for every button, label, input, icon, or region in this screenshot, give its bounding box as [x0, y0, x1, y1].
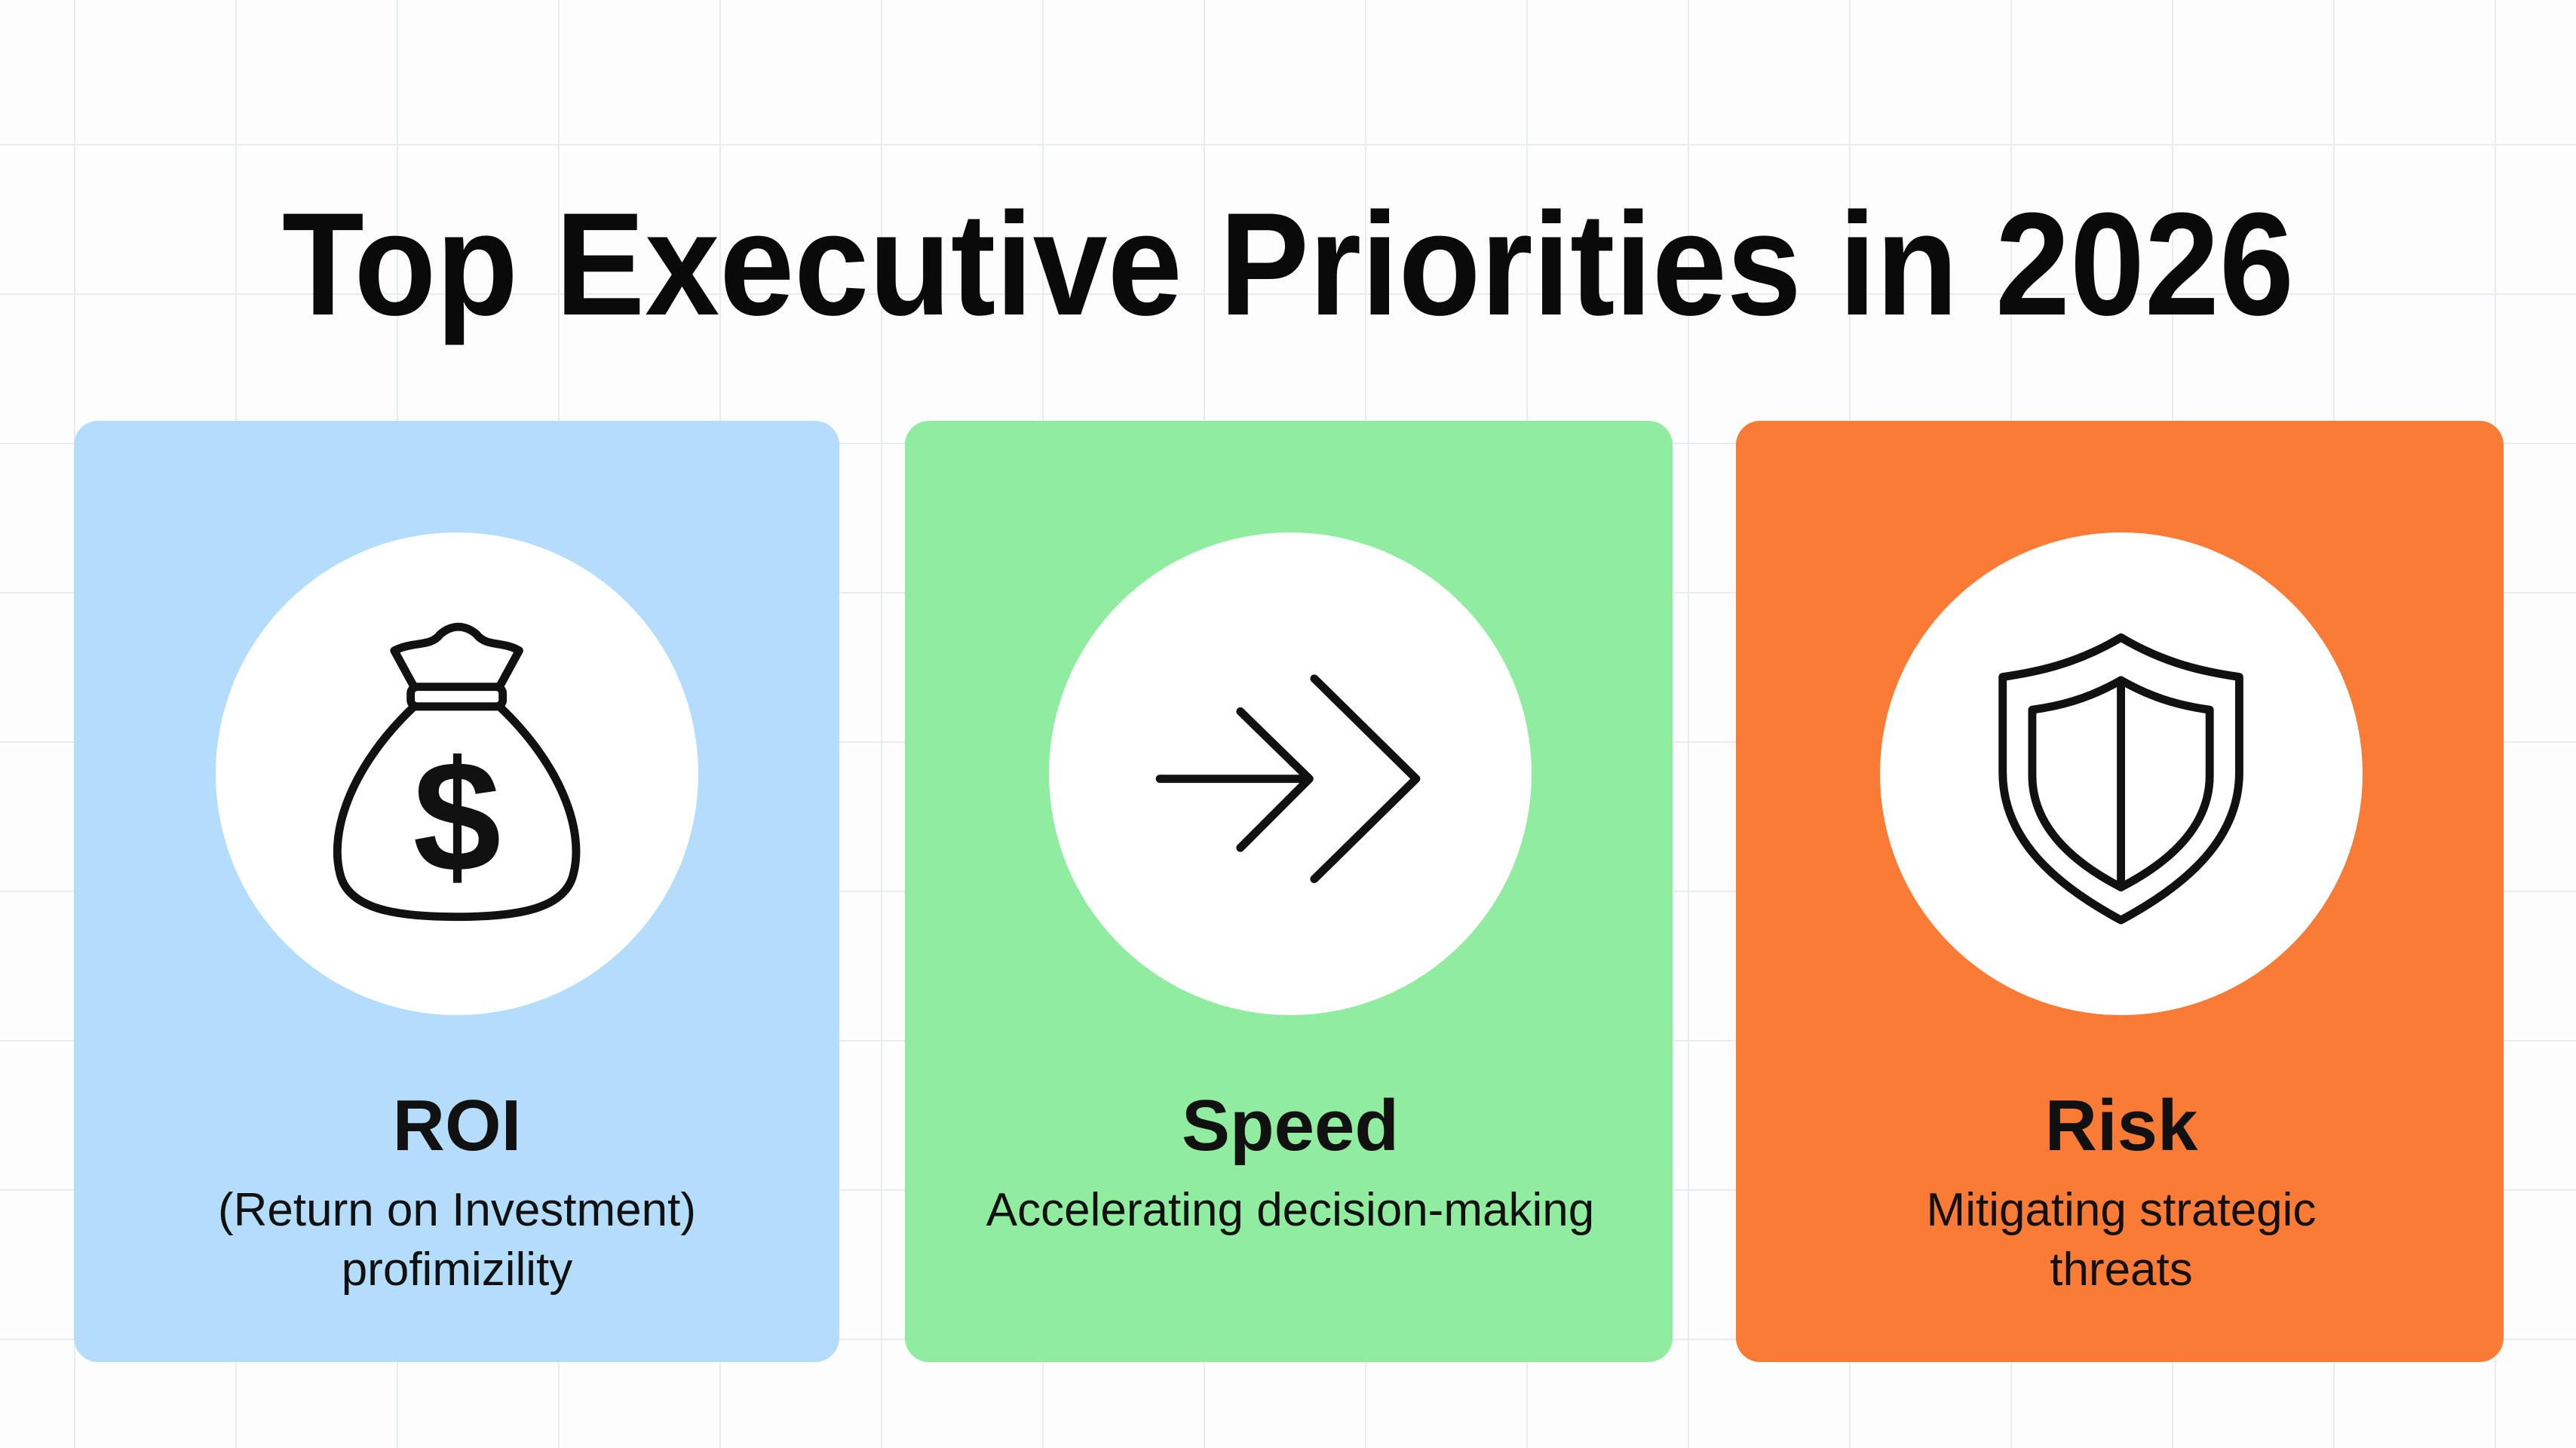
- icon: money bag: [216, 532, 698, 1015]
- panel: Risk: [1736, 421, 2504, 1362]
- label: Risk: Risk: [2045, 1085, 2198, 1166]
- text: Speed description: Accelerating decision-making: [986, 1184, 1594, 1236]
- text: Risk description: Mitigating strategic: [1927, 1184, 2316, 1236]
- label: Speed: Speed: [1182, 1085, 1399, 1166]
- icon: shield: [1880, 532, 2363, 1015]
- icon: fast forward arrow: [1049, 532, 1532, 1015]
- title: Top Executive Priorities in 2026: [282, 183, 2294, 346]
- panel: Speed: [905, 421, 1673, 1362]
- text: Risk description: threats: [2050, 1244, 2193, 1296]
- label: ROI: ROI: [393, 1085, 521, 1166]
- icon: money bag: $: [413, 728, 501, 905]
- panel: ROI: [74, 421, 839, 1362]
- text: ROI description: profimizility: [342, 1244, 572, 1296]
- text: ROI description: (Return on Investment): [218, 1184, 696, 1236]
